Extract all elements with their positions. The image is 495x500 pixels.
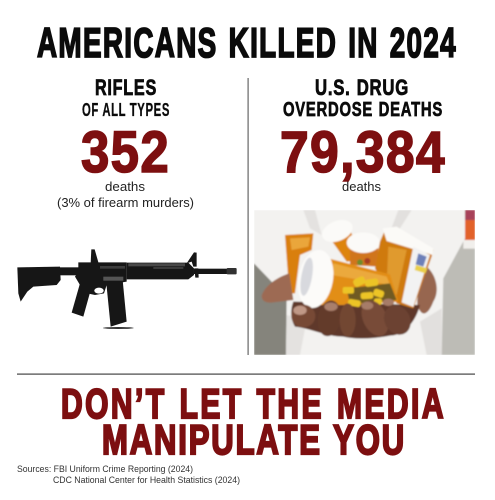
slogan <box>61 380 446 463</box>
icon: rifle <box>17 249 237 329</box>
horizontal rule <box>17 374 475 375</box>
rifle death count: 352 <box>81 120 170 185</box>
photo: hands holding pill bottles <box>254 210 475 355</box>
rifle deaths caption <box>57 179 194 210</box>
pills <box>343 275 385 307</box>
fingers <box>291 305 315 327</box>
overdose heading: U.S. DRUG <box>315 75 409 100</box>
back bottles <box>332 232 353 262</box>
rifles heading <box>82 75 170 120</box>
panel: drug overdoses <box>254 75 475 355</box>
rifles heading: OF ALL TYPES <box>82 100 170 120</box>
overdose heading <box>283 75 443 121</box>
rifle deaths caption: deaths <box>105 179 145 194</box>
sources: CDC National Center for Health Statistics (2024) <box>53 475 240 485</box>
panel: rifles <box>17 75 237 329</box>
palm <box>291 302 420 339</box>
rifles heading: RIFLES <box>95 75 157 100</box>
divider <box>248 78 249 355</box>
big front bottle <box>320 258 398 305</box>
rifle deaths caption: (3% of firearm murders) <box>57 195 194 210</box>
sources: Sources: FBI Uniform Crime Reporting (2024) <box>17 464 193 474</box>
sources <box>17 464 240 485</box>
overdose death count: 79,384 <box>280 120 446 185</box>
overdose deaths caption: deaths <box>342 179 381 194</box>
overdose heading: OVERDOSE DEATHS <box>283 99 443 121</box>
left back bottle <box>285 233 313 293</box>
right bottle <box>375 230 433 308</box>
left hand <box>262 273 293 303</box>
right hand thumb <box>417 267 437 313</box>
